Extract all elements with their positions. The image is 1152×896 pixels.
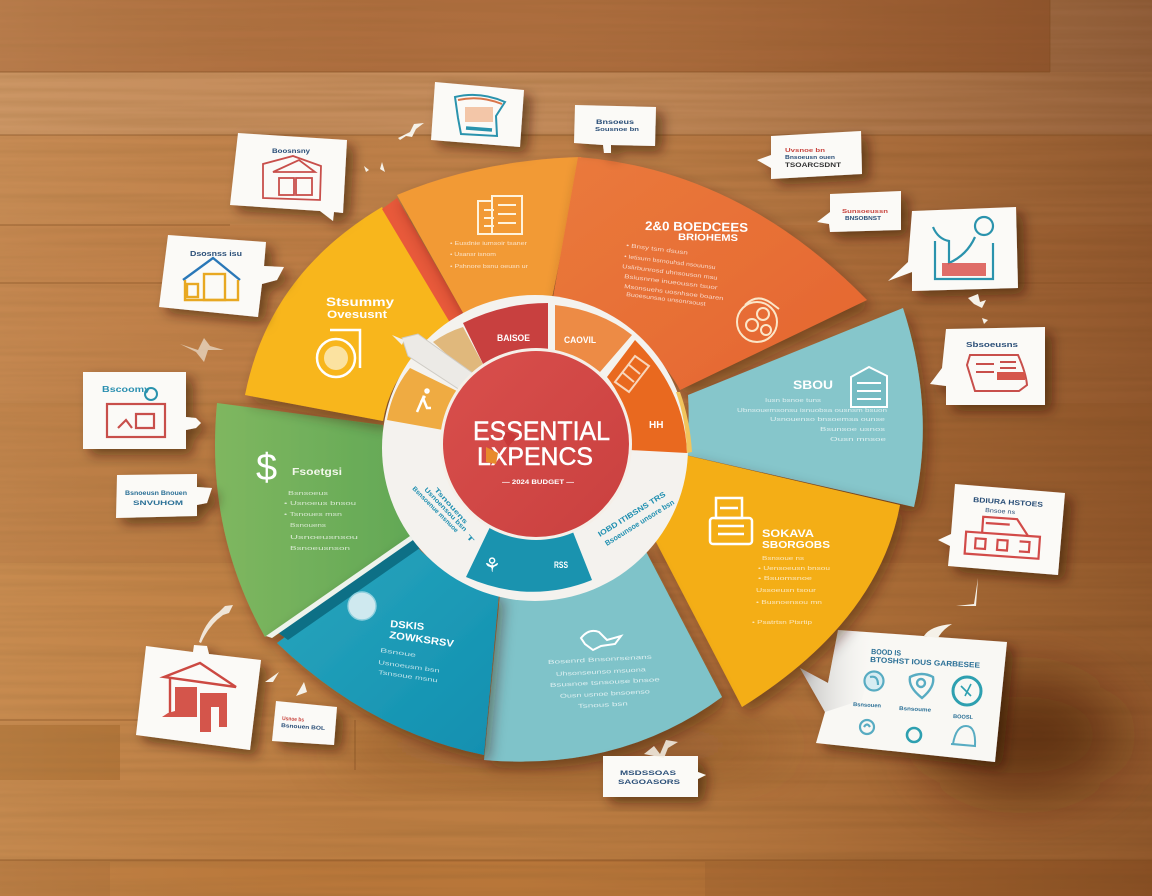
segment: dark teal bottom left: ZOWKSRSV xyxy=(389,630,455,650)
paper scraps xyxy=(180,123,988,758)
ring: tan xyxy=(433,327,485,377)
icon: package xyxy=(455,95,505,136)
card: right lower: BDIURA HSTOES xyxy=(973,497,1044,509)
card: label top center: Sousnoe bn xyxy=(595,127,640,133)
text: green lines: Bsnsoeus xyxy=(288,491,328,497)
card: icons panel large: BTOSHST IOUS GARBESEE xyxy=(870,655,980,670)
segment: yellow right: SBORGOBS xyxy=(762,540,830,551)
text: teal right lines: Ousn mnsoe xyxy=(830,437,886,443)
card: label bottom center xyxy=(603,756,706,797)
card: icons panel large: BOOD IS xyxy=(871,647,901,658)
icon: ring xyxy=(953,677,981,705)
card: notes right xyxy=(930,327,1045,405)
icon: circle one xyxy=(864,672,884,690)
segment: green left xyxy=(215,403,413,637)
segment: teal right xyxy=(686,308,923,507)
tube marker xyxy=(392,334,474,392)
card: label top right xyxy=(757,131,862,179)
card: house left xyxy=(159,235,284,317)
card: label top center: Bnsoeus xyxy=(596,120,635,126)
text: dark teal lines: Tsnsoue msnu xyxy=(378,670,438,684)
title: ESSENTIAL xyxy=(473,416,610,446)
card: label bottom left small: Usnoe bs xyxy=(282,716,304,724)
text: yellow bullets: • Uensoeusn bnsou xyxy=(758,566,830,572)
card: icons panel large xyxy=(800,630,1007,762)
icon: shield xyxy=(910,674,933,698)
icon: house xyxy=(263,156,321,200)
ring: teal bottom: RSS xyxy=(554,560,568,570)
icon: dome xyxy=(951,726,975,746)
text: dark teal lines xyxy=(378,648,440,684)
icon: bird and sign xyxy=(933,217,993,279)
card: box top xyxy=(431,82,524,147)
ring: left white text: Bsnsoenue msnuoe xyxy=(411,485,460,535)
text: teal bottom lines: Bosenrd Bnsonrsenans xyxy=(548,655,652,666)
title: LXPENCS xyxy=(477,443,593,471)
text: yellow bullets: • Psatrtsn Ptsrtip xyxy=(752,620,812,626)
ring: red: BAISOE xyxy=(497,333,530,343)
segment: red strip xyxy=(382,198,466,326)
text: teal right lines: Iusn bsnoe tuns xyxy=(765,398,821,404)
circular expense wheel xyxy=(215,157,923,762)
icon: figure xyxy=(417,390,431,412)
card: label top right: TSOARCSDNT xyxy=(785,162,841,169)
ring: orange xyxy=(607,340,692,453)
icon: red house xyxy=(164,663,236,715)
card: label bottom left small xyxy=(272,701,337,745)
segment: orange-red top right xyxy=(552,157,867,390)
text: orange-red bullets: • Ietisurn bsrnouhsd nsouunsu xyxy=(624,254,716,271)
title xyxy=(473,416,610,471)
ring: left white text: Usnoensou bsn xyxy=(423,487,468,533)
ring: left white text: T xyxy=(465,534,475,544)
card: notes right: Sbsoeusns xyxy=(966,342,1018,349)
text: teal right lines: Ubnsouemsonsu isnuobsa ousnsm bsuon xyxy=(737,408,887,414)
icon: building row xyxy=(965,516,1041,559)
card: screen left xyxy=(83,372,201,449)
ring: right white text: IOBD ITIBSNS TRS xyxy=(596,490,667,539)
text: orange bullets: • Usansr isnom xyxy=(450,252,496,258)
card: label left: Bsnoeusn Bnouen xyxy=(125,491,187,497)
text: green lines: • Tsnoues msn xyxy=(284,512,342,518)
card: label bottom center: MSDSSOAS xyxy=(620,770,677,777)
text: green lines: Bsnouens xyxy=(290,523,326,529)
icon: printer xyxy=(967,355,1027,391)
segment: orange-red top right: BRIOHEMS xyxy=(678,232,738,244)
icon: car xyxy=(581,631,621,650)
card: right lower xyxy=(938,484,1065,575)
text: teal right lines xyxy=(737,398,887,443)
card: label top right: Bnsoeusn ouen xyxy=(785,155,836,161)
card: label left: SNVUHOM xyxy=(133,500,183,507)
ring: orange: HH xyxy=(649,420,663,431)
segment: green left: Fsoetgsi xyxy=(292,466,342,478)
card: icons panel large: Bsnsouen xyxy=(853,702,882,709)
segment: yellow left xyxy=(245,207,452,421)
card: house left top xyxy=(230,133,347,221)
text: green lines xyxy=(284,491,358,552)
segment: dark teal bottom left xyxy=(266,536,499,755)
card: label left xyxy=(116,474,212,518)
card: icons panel large: BOOSL xyxy=(953,714,974,721)
ring: light orange: CAOVIL xyxy=(564,335,596,345)
icon: hand xyxy=(615,356,649,392)
ring: teal bottom xyxy=(466,527,592,592)
text: green lines: • Usnoeus bnsou xyxy=(284,501,356,507)
ring: light orange xyxy=(555,305,632,372)
icon: yellow house xyxy=(183,258,240,300)
icon: dollar sign: $ xyxy=(256,447,277,489)
text: yellow bullets: • Bsuomsnoe xyxy=(758,576,812,582)
card: icon right upper xyxy=(888,207,1018,291)
subtitle: — 2024 BUDGET — xyxy=(502,480,574,486)
text: dark teal lines: Usnoeusm bsn xyxy=(378,660,440,675)
icon: documents xyxy=(478,196,522,234)
card: house left top: Boosnsny xyxy=(272,148,310,155)
text: yellow bullets xyxy=(752,556,830,626)
icon: title ornament xyxy=(486,432,517,464)
text: teal right lines: Usnouenso bnsoemsa ounse xyxy=(770,417,885,423)
icon: headset xyxy=(317,330,360,377)
segment: yellow right xyxy=(655,455,900,707)
segment: teal right: SBOU xyxy=(793,378,833,392)
text: yellow bullets: Ussoeusn tsour xyxy=(756,588,816,594)
ring: right white text: Bsoeunsoe unsore bsn xyxy=(603,497,676,548)
card: label bottom left small: Bsnouen BOL xyxy=(281,723,326,732)
card: icons panel large: Bsnsoume xyxy=(899,706,931,714)
segment: orange top xyxy=(397,157,581,318)
text: dark teal lines: Bsnoue xyxy=(380,648,416,659)
center circle xyxy=(440,348,632,540)
text: teal bottom lines: Uhsonseunso msuona xyxy=(556,667,647,678)
text: teal bottom lines: Ousn usnoe bnsoenso xyxy=(560,689,650,700)
text: yellow bullets: • Busnoensou mn xyxy=(756,600,822,606)
ring: left white text: Tsnouens xyxy=(433,487,469,526)
text: orange bullets: • Pshnore bsnu oeusn ur xyxy=(450,264,528,270)
card: label right small: BNSOBNST xyxy=(845,216,881,222)
card: house left: Dsosnss isu xyxy=(190,251,242,258)
card: label right small xyxy=(817,191,901,232)
segment: yellow left: Stsummy xyxy=(326,297,395,309)
segment: yellow right: SOKAVA xyxy=(762,528,814,540)
text: orange-red bullets: Buoesunsao unsonrsoust xyxy=(626,292,706,308)
ring: red xyxy=(463,303,548,368)
ring: left orange xyxy=(387,368,459,430)
segment: yellow left: Ovesusnt xyxy=(327,309,387,321)
icon: building xyxy=(851,367,887,407)
inner ring xyxy=(382,295,692,601)
ring: teal bottom: ⚘ xyxy=(483,555,501,577)
text: orange-red bullets: • Bnsy tsm dsusn xyxy=(626,243,688,257)
text: teal bottom lines xyxy=(548,655,660,710)
text: yellow bullets: Bsnsoue ns xyxy=(762,556,804,562)
text: orange-red bullets xyxy=(622,243,724,308)
text: green lines: Usnoeusnsou xyxy=(290,535,358,541)
text: green lines: Bsnoeusnson xyxy=(290,546,350,552)
card: screen left: Bscoomy xyxy=(102,385,151,394)
segment: dark teal bottom left: DSKIS xyxy=(390,619,425,633)
text: teal bottom lines: Bsusnoe tsnsouse bnsoe xyxy=(550,677,660,689)
card: label top right: Uvsnoe bn xyxy=(785,148,826,154)
card: label right small: Sunsoeussn xyxy=(842,209,889,215)
text: teal bottom lines: Tsnous bsn xyxy=(578,701,628,710)
segment: orange-red top right: 2&0 BOEDCEES xyxy=(645,219,748,235)
card: label top center xyxy=(574,105,656,153)
text: teal right lines: Bsunsoe usnos xyxy=(820,427,885,433)
ring: left white text xyxy=(411,485,475,544)
text: orange bullets: • Eusdnie iumsoir tsaner xyxy=(450,241,527,247)
card: house bottom left xyxy=(136,645,261,750)
icon: screen xyxy=(107,404,165,437)
segment: teal light bottom xyxy=(484,540,722,762)
icon: small ring xyxy=(907,728,921,742)
card: right lower: Bnsoe ns xyxy=(985,508,1015,516)
icon: cash register xyxy=(710,498,752,544)
text: orange-red bullets: Msonsuehs uosnhsoe boaren xyxy=(624,284,724,302)
text: orange-red bullets: Bsiusnrne inueoussn tsuor xyxy=(624,274,718,291)
icon: small circle xyxy=(860,720,874,734)
text: orange-red bullets: Uslirbunrosd uhnsouson msu xyxy=(622,264,718,282)
card: label bottom center: SAGOASORS xyxy=(618,779,681,786)
text: orange bullets xyxy=(450,241,528,270)
icon: globe xyxy=(348,592,376,620)
icon: coin pouch xyxy=(737,298,779,342)
